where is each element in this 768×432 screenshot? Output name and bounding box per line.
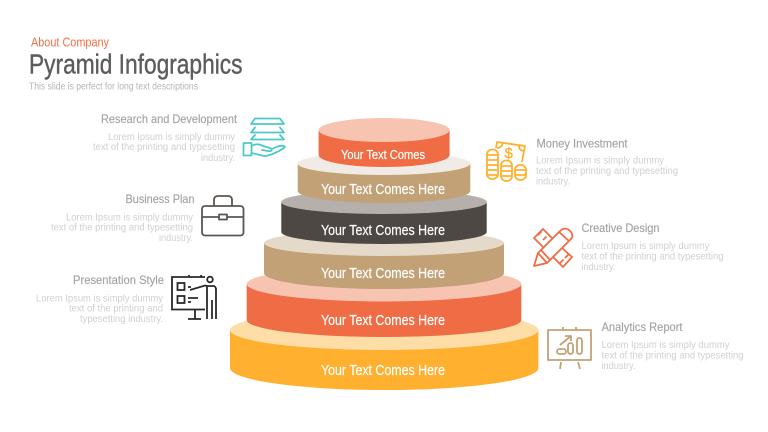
block: Business Plan: text of the printing and typesetting	[51, 222, 193, 234]
block: Money Investment: Lorem Ipsum is simply dummy	[536, 156, 664, 166]
block: Creative Design: industry.	[582, 262, 616, 273]
icon: money and coins	[487, 142, 526, 181]
tier 6: yellow base: Your Text Comes Here	[321, 363, 445, 379]
block: Analytics Report: Lorem Ipsum is simply dummy	[602, 340, 730, 351]
block: Business Plan: Business Plan	[126, 192, 194, 206]
block: Creative Design: Creative Design	[582, 221, 660, 235]
subtitle: This slide is perfect for long text descriptions	[29, 82, 198, 92]
tier 2: tan: Your Text Comes Here	[321, 182, 445, 198]
block: Analytics Report: industry.	[602, 361, 636, 372]
block: Business Plan: Lorem Ipsum is simply dummy	[66, 212, 193, 224]
block: Money Investment: industry.	[536, 176, 570, 188]
block: Research and Development: industry.	[201, 153, 235, 164]
eyebrow: About Company: About Company	[31, 36, 110, 50]
block: Research and Development: Lorem Ipsum is simply dummy	[108, 132, 235, 143]
block: Money Investment: text of the printing and typesetting	[536, 166, 678, 177]
block: Creative Design	[582, 221, 724, 273]
tier 1: orange top: Your Text Comes	[341, 148, 425, 162]
tier 2: tan	[298, 152, 470, 203]
block: Analytics Report	[602, 320, 744, 372]
block: Research and Development: Research and Development	[101, 112, 238, 126]
icon: briefcase	[202, 196, 244, 236]
block: Presentation Style: Lorem Ipsum is simply dummy	[36, 294, 163, 304]
block: Creative Design: text of the printing and typesetting	[582, 252, 724, 262]
tier 1: orange top	[319, 118, 450, 167]
block: Research and Development: text of the printing and typesetting	[93, 142, 235, 153]
icon: presenter at board	[172, 275, 216, 319]
tier 5: orange: Your Text Comes Here	[321, 313, 445, 329]
tier 6: yellow base	[230, 310, 538, 390]
icon: analytics board	[548, 327, 591, 369]
block: Business Plan: industry.	[159, 233, 193, 244]
icon: hand holding layers	[244, 118, 285, 156]
tier 4: tan	[264, 230, 504, 289]
icon: ruler and pencil	[534, 229, 572, 267]
icon: money and coins: $	[504, 145, 514, 162]
tier 4: tan: Your Text Comes Here	[321, 266, 445, 282]
block: Research and Development	[93, 112, 238, 164]
block: Presentation Style	[36, 273, 164, 325]
block: Analytics Report: text of the printing and typesetting	[602, 350, 744, 362]
block: Business Plan	[51, 192, 194, 244]
block: Creative Design: Lorem Ipsum is simply dummy	[582, 241, 710, 252]
tier 3: dark	[281, 190, 487, 244]
block: Presentation Style: typesetting industry.	[80, 314, 163, 325]
block: Presentation Style: Presentation Style	[73, 273, 164, 287]
tier 5: orange	[247, 266, 521, 337]
block: Presentation Style: text of the printing and	[69, 304, 163, 314]
block: Money Investment	[536, 136, 678, 188]
block: Analytics Report: Analytics Report	[602, 320, 683, 334]
pyramid chart	[230, 118, 538, 390]
title: Pyramid Infographics	[29, 48, 243, 80]
block: Money Investment: Money Investment	[536, 136, 628, 150]
tier 3: dark: Your Text Comes Here	[321, 223, 445, 239]
